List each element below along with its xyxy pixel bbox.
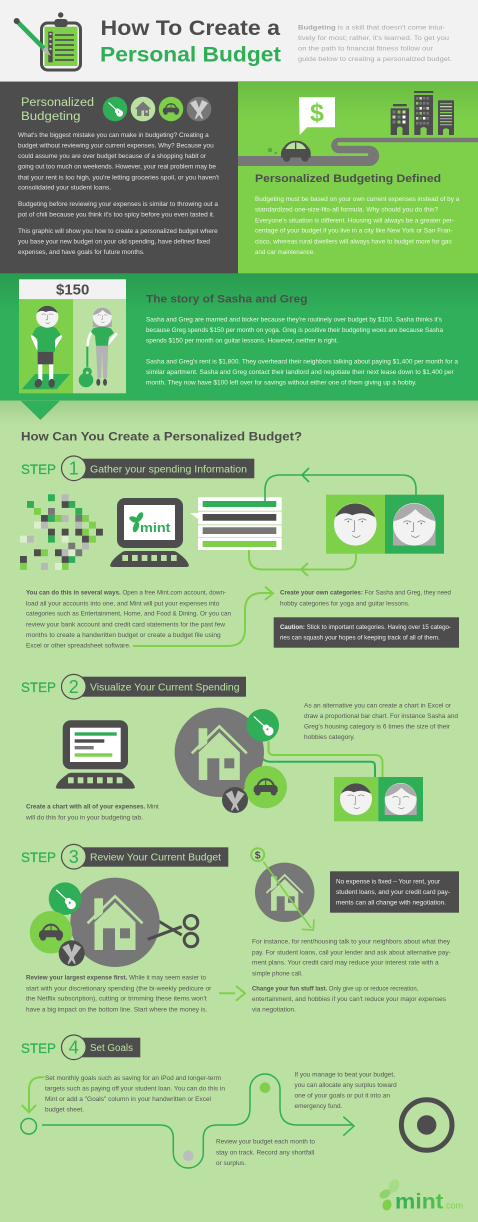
step 2 heading: 2 xyxy=(69,677,79,697)
text: review largest expense: the Netflix subscription), cutting or trimming these items won't xyxy=(26,996,207,1003)
icon: guitar circle xyxy=(49,882,81,915)
body text: personalized budgeting: This graphic will show you how to create a personalized budget where xyxy=(18,228,218,235)
text: proportional bar chart xyxy=(304,702,458,741)
step 2 heading: Visualize Your Current Spending xyxy=(90,682,240,694)
icon: small house circle xyxy=(255,863,314,922)
step 1 heading xyxy=(21,456,254,481)
heading: personalized budgeting xyxy=(21,97,94,123)
text: review largest expense: start with your discretionary spending (the bi-weekly pedicure or xyxy=(26,985,212,992)
arrow: decreasing cost xyxy=(263,862,314,930)
intro text xyxy=(298,24,452,63)
step 4 heading: Set Goals xyxy=(90,1043,133,1054)
text: for instance: For instance, for rent/housing talk to your neighbors about what they xyxy=(252,939,451,946)
body text: personalized budgeting: What's the biggest mistake you can make in budgeting? Creating a xyxy=(18,132,209,139)
callout: caution: Caution: Stick to important categories. Having over 15 catego- xyxy=(280,624,451,631)
text: change your fun stuff last xyxy=(252,985,447,1013)
text: create your own categories xyxy=(280,590,451,607)
step 2 heading xyxy=(21,674,246,699)
text: for instance xyxy=(252,939,451,977)
text: set monthly goals: targets such as paying off your student loan. You can do this in xyxy=(45,1085,225,1092)
text: set monthly goals: budget sheet. xyxy=(45,1107,84,1114)
title: Personal Budget xyxy=(100,44,281,66)
callout: no expense is fixed: student loans, and your credit card pay- xyxy=(336,889,450,896)
icon: speech bubble with dollar: $ xyxy=(310,99,324,127)
amount label: $150 xyxy=(56,282,89,298)
panel: personalized budgeting xyxy=(0,82,238,274)
text: beat your budget xyxy=(294,1071,397,1110)
step 2 heading: STEP xyxy=(21,679,56,695)
body text: personalized budgeting defined xyxy=(255,196,460,256)
text: review each month xyxy=(216,1139,315,1167)
body text: personalized budgeting defined: Budgeting must be based on your own current expenses instead of by a xyxy=(255,196,460,203)
text: review each month: or surplus. xyxy=(216,1160,246,1167)
text: review largest expense xyxy=(26,975,212,1013)
callout: no expense is fixed: No expense is fixed – Your rent, your xyxy=(336,878,441,885)
body text: personalized budgeting: budget without reviewing your current expenses. Why? Because you xyxy=(18,143,214,150)
title xyxy=(100,17,281,66)
text: create a chart xyxy=(25,804,159,821)
intro text: Budgeting is a skill that doesn't come intui- xyxy=(298,24,445,31)
step 3 heading: 3 xyxy=(69,847,79,867)
text: step 1 explanation: You can do this in several ways. Open a free Mint.com account, down- xyxy=(26,590,226,597)
step 1 heading: Gather your spending Information xyxy=(90,464,247,475)
icon: city buildings xyxy=(391,91,454,135)
body text: personalized budgeting: pot of chili because you think it's too spicy before you even tasted it. xyxy=(18,212,215,219)
text: review largest expense: have a big impact on the bottom line. Start where the money is. xyxy=(26,1006,207,1013)
arrow: to change fun stuff xyxy=(219,986,245,1001)
text: step 1 explanation: review your bank account and credit card statements for the past few xyxy=(26,621,225,628)
text: beat your budget: emergency fund. xyxy=(294,1103,342,1110)
body text: personalized budgeting: consolidated your student loans. xyxy=(18,185,111,192)
chart: proportional circles xyxy=(175,708,287,813)
step 4 heading: STEP xyxy=(21,1040,56,1056)
connectors: categories to faces xyxy=(263,741,382,777)
icon: guitar circle xyxy=(246,709,279,742)
icon: large house circle xyxy=(175,708,264,797)
icon: house xyxy=(131,97,155,121)
section heading: How Can You Create a Personalized Budget? xyxy=(21,432,302,444)
text: beat your budget: you can allocate any surplus toward xyxy=(294,1082,397,1089)
arrow: loop from faces to list xyxy=(249,550,356,576)
intro text: tively for most; rather, it's learned. To get you xyxy=(298,35,449,42)
logo: mint.com xyxy=(378,1178,463,1213)
title: How To Create a xyxy=(100,17,280,40)
icon: guitar xyxy=(103,97,127,121)
icon: tools circle xyxy=(222,787,248,813)
text: step 1 explanation: categories such as Entertainment, Home, and Food & Dining. Or you can xyxy=(26,611,231,618)
text: step 1 explanation: load all your accounts into one, and Mint will put your expenses into xyxy=(26,600,220,607)
text: create your own categories: hobby categories for yoga and guitar lessons. xyxy=(280,600,410,607)
text: step 1 explanation: Excel or other spreadsheet software. xyxy=(26,643,131,650)
icon: car circle xyxy=(30,911,72,954)
step 3 heading: Review Your Current Budget xyxy=(90,852,221,864)
text: for instance: ment plans. Your credit card may reduce your interest rate with a xyxy=(252,960,439,967)
body text: story: Sasha and Greg are married and bicker because they're routinely over budget by $150. Sasha thinks it's xyxy=(146,316,443,323)
body text: personalized budgeting defined: centage of your budget if you live in a city like New York or San Fran- xyxy=(255,228,453,235)
icon: laptop with mint logo xyxy=(110,498,189,567)
text: change your fun stuff last: via negotiation. xyxy=(252,1006,296,1013)
body text: personalized budgeting: you base your new budget on your old spending, have defined fixed xyxy=(18,238,210,245)
text: step 1 explanation: months to create a handwritten budget or create a budget file using xyxy=(26,632,221,639)
icon: dollar circle: $ xyxy=(255,849,261,861)
icon: pixel mosaic xyxy=(20,494,103,570)
milestone dot: surplus xyxy=(260,1082,270,1093)
logo: mint.com: mint xyxy=(395,1190,443,1213)
text: proportional bar chart: As an alternative you can create a chart in Excel or xyxy=(304,702,452,709)
heading: personalized budgeting: Budgeting xyxy=(21,111,80,123)
step 4 heading xyxy=(21,1035,140,1060)
callout: caution xyxy=(274,617,459,648)
step 1 heading: STEP xyxy=(21,461,56,477)
body text: story: spends $150 per month on guitar lessons. However, neither is right. xyxy=(146,338,338,345)
arrow: explanation to categories xyxy=(133,587,273,646)
heading: personalized budgeting defined: Personalized Budgeting Defined xyxy=(255,173,441,185)
light section shading xyxy=(0,401,478,425)
milestone dot: review xyxy=(183,1150,194,1161)
road xyxy=(238,138,478,166)
list of categories xyxy=(190,497,282,550)
body text: personalized budgeting: expenses, and have goals for future months. xyxy=(18,249,145,256)
panel: personalized budgeting defined xyxy=(238,82,478,274)
icon: target xyxy=(401,1100,452,1150)
text: for instance: pay. For student loans, call your lender and ask about alternative pay- xyxy=(252,949,451,956)
timeline path with arrow xyxy=(42,1074,354,1168)
icon: car xyxy=(159,97,183,121)
logo: mint.com: .com xyxy=(444,1200,463,1211)
text: beat your budget: If you manage to beat your budget, xyxy=(294,1071,395,1078)
body text: personalized budgeting: Budgeting before reviewing your expenses is similar to throwing out a xyxy=(18,201,218,208)
icon: car circle xyxy=(244,766,287,808)
figure: Sasha with guitar xyxy=(79,307,116,387)
body text: personalized budgeting: that your rent is too high, you're letting groceries spoil, or you haven't xyxy=(18,174,219,181)
text: review each month: Review your budget each month to xyxy=(216,1139,315,1146)
text: step 1 explanation xyxy=(26,590,231,650)
intro text: guide below to creating a personalized budget. xyxy=(298,56,452,63)
text: create a chart: will do this for you in your budgeting tab. xyxy=(25,814,143,821)
text: change your fun stuff last: entertainment, and hobbies if you can't reduce your major expenses xyxy=(252,996,447,1003)
icon: scissors xyxy=(148,916,198,947)
text: set monthly goals: Set monthly goals such as saving for an iPod and longer-term xyxy=(45,1075,221,1082)
text: change your fun stuff last: Change your fun stuff last. Only give up or reduce recreation, xyxy=(252,985,418,992)
step 1 heading: 1 xyxy=(69,459,79,479)
timeline start circle xyxy=(21,1118,36,1134)
body text: personalized budgeting defined: and car maintenance. xyxy=(255,249,315,256)
body text: personalized budgeting xyxy=(18,132,219,256)
callout: no expense is fixed: ments can all change with negotiation. xyxy=(336,899,446,906)
step 3 heading xyxy=(21,844,228,869)
illustration: Sasha and Greg xyxy=(19,279,126,393)
body text: personalized budgeting: going out too much on weekends. However, your real problem may be xyxy=(18,164,216,171)
heading: story: The story of Sasha and Greg xyxy=(146,293,308,305)
text: create a chart: Create a chart with all of your expenses. Mint xyxy=(26,804,159,811)
intro text: on the path to financial fitness follow our xyxy=(298,45,434,52)
text: review largest expense: Review your largest expense first. While it may seem easier to xyxy=(26,975,206,982)
callout: caution: ries can squash your hopes of keeping track of all of them. xyxy=(280,635,440,642)
arrow: goals down to start xyxy=(22,1077,44,1112)
body text: story: because Greg spends $150 per month on yoga. Greg is positive their budgeting woes are because Sasha xyxy=(146,327,443,334)
body text: personalized budgeting: could assume you are over budget because of a shopping habit or xyxy=(18,153,207,160)
illustration: scissors cutting housing xyxy=(30,878,198,967)
heading: personalized budgeting: Personalized xyxy=(21,97,94,109)
body text: story xyxy=(146,316,458,387)
body text: personalized budgeting defined: Everyone's situation is different. Housing will always be a greater per- xyxy=(255,217,454,224)
text: proportional bar chart: hobbies category. xyxy=(304,734,355,741)
body text: story: Sasha and Greg's rent is $1,800. They overheard their neighbors talking about paying $1,400 per month for a xyxy=(146,358,458,365)
icon: laptop with bar chart xyxy=(56,720,135,789)
icon: crossed tools xyxy=(187,97,211,121)
step 3 heading: STEP xyxy=(21,849,56,865)
panel: story of Sasha and Greg xyxy=(0,273,478,425)
body text: personalized budgeting defined: cisco, whereas rural dwellers will always have to budget more for gas xyxy=(255,238,452,245)
arrow: loop from list to faces xyxy=(265,468,416,501)
faces: step 2 xyxy=(334,777,423,821)
logo: mint: mint xyxy=(140,520,171,535)
icon: large house circle xyxy=(70,878,160,967)
icon: clipboard and pencil xyxy=(14,12,81,70)
body text: personalized budgeting defined: standardized one-size-fits-all formula. Why should you do this? xyxy=(255,207,438,214)
body text: story: similar apartment. Sasha and Greg contact their landlord and negotiate their next lease down to $1,400 per xyxy=(146,369,455,376)
text: review each month: stay on track. Record any shortfall xyxy=(216,1149,315,1156)
pointer triangle xyxy=(21,401,60,420)
text: set monthly goals xyxy=(45,1075,225,1114)
figure: Greg xyxy=(22,306,70,389)
text: proportional bar chart: Greg's housing category is 6 times the size of their xyxy=(304,724,451,731)
text: proportional bar chart: draw a proportional bar chart. For instance Sasha and xyxy=(304,713,458,720)
text: for instance: simple phone call. xyxy=(252,970,303,977)
body text: story: month. They now have $100 left over for savings without either one of them giving up a hobby. xyxy=(146,380,417,387)
text: create your own categories: Create your own categories: For Sasha and Greg, they need xyxy=(280,590,451,597)
icon: car on road xyxy=(268,141,311,162)
callout: no expense is fixed xyxy=(330,871,459,913)
text: set monthly goals: Mint or add a "Goals" column in your handwritten or Excel xyxy=(45,1096,212,1103)
text: beat your budget: one of your goals or put it into an xyxy=(294,1093,390,1100)
icon: speech bubble with dollar xyxy=(299,97,335,135)
icon: tools circle xyxy=(59,940,85,966)
header band xyxy=(0,0,478,82)
faces: Greg and Sasha xyxy=(326,495,444,554)
step 4 heading: 4 xyxy=(69,1038,79,1058)
illustration: reducing housing cost xyxy=(251,848,314,930)
